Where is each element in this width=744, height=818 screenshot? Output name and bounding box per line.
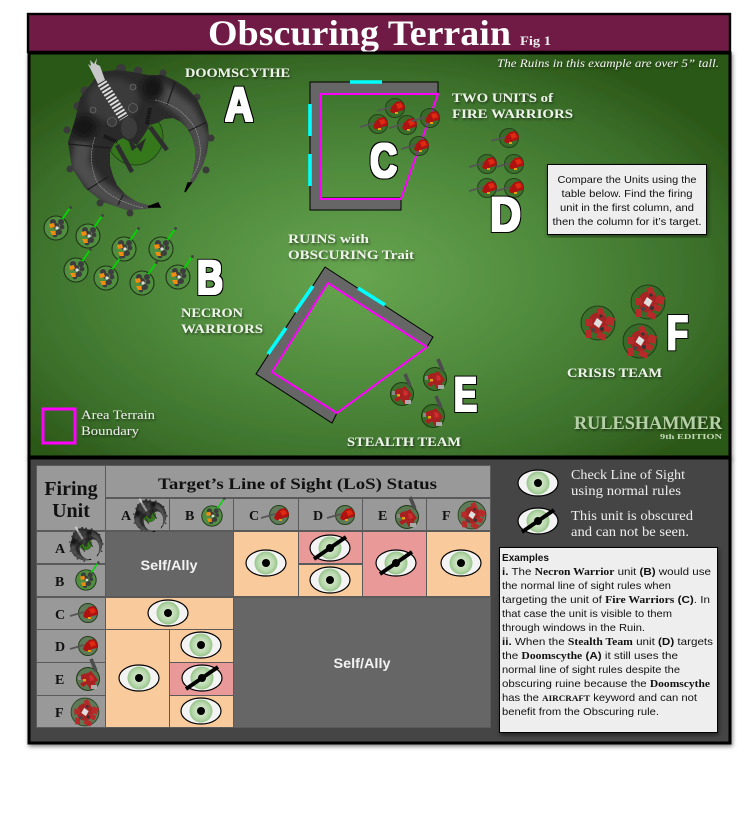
letter E: E	[454, 369, 477, 422]
row F header	[37, 696, 105, 727]
label: two units of Fire Warriors: TWO UNITS of	[452, 90, 554, 105]
row B header: B	[55, 575, 64, 590]
unit A: Doomscythe model	[64, 58, 214, 216]
letter A: A	[225, 79, 253, 132]
cell: F target B visible	[170, 696, 233, 727]
cell: A-B target E obscured	[363, 532, 426, 596]
legend: visible eye: Check Line of Sight	[571, 468, 685, 483]
watermark: Ruleshammer: RULESHAMMER	[574, 413, 722, 434]
examples text box: ii. When the Stealth Team unit (D) targets	[502, 636, 713, 648]
header: firing unit: Unit	[52, 500, 90, 522]
legend: area terrain boundary: Boundary	[81, 423, 140, 438]
instruction callout: table below. Find the firing	[562, 188, 693, 200]
column D header	[299, 499, 362, 530]
cell: A-B target F visible	[427, 532, 490, 596]
header: target status: Target’s Line of Sight (LoS) Status	[158, 476, 437, 493]
examples text box: obscuring ruine because the Doomscythe	[502, 678, 710, 690]
column F header	[427, 499, 490, 530]
instruction callout	[548, 164, 706, 234]
row E header	[37, 659, 105, 695]
examples text box: targeting the unit of Fire Warriors (C). In	[502, 594, 710, 606]
panel: line of sight table section	[29, 458, 730, 743]
unit B: Necron Warriors	[44, 206, 194, 295]
row A header	[37, 526, 105, 563]
title: Obscuring Terrain	[208, 13, 511, 53]
panel: battlefield map	[29, 53, 730, 457]
column D header: D	[313, 509, 323, 524]
row D header: D	[55, 640, 65, 655]
examples text box: the normal line of sight rules when	[502, 580, 671, 592]
examples text box: benefit from the Obscuring rule.	[502, 706, 659, 718]
cell: D-F target A visible	[106, 630, 169, 727]
legend: obscured eye: and can not be seen.	[571, 525, 689, 540]
label: Necron Warriors: NECRON	[181, 305, 244, 320]
header: target status	[106, 466, 490, 497]
examples text box: i. The Necron Warrior unit (B) would use	[502, 566, 711, 578]
cell: self/ally C-F: Self/Ally	[334, 656, 391, 671]
examples text box: through windows in the Ruin.	[502, 622, 645, 634]
letter F: F	[667, 307, 688, 360]
column B header: B	[185, 509, 194, 524]
examples text box: normal line of sight rules despite the	[502, 664, 680, 676]
legend: area terrain boundary	[43, 407, 156, 443]
legend: obscured eye	[518, 508, 693, 540]
column B header	[170, 497, 233, 530]
figure number: Fig 1	[520, 33, 551, 48]
cell: B target D visible	[299, 565, 362, 596]
unit F: Crisis Team	[581, 285, 665, 359]
label: ruins with Obscuring trait: RUINS with	[288, 231, 370, 246]
examples text box: that case the unit is visible to them	[502, 608, 672, 620]
examples text box	[500, 548, 718, 732]
label: ruins with Obscuring trait	[288, 231, 415, 262]
ruin: rotated with area boundary	[256, 267, 433, 423]
row A header: A	[55, 542, 66, 557]
terrain note: The Ruins in this example are over 5” tall.	[497, 56, 719, 70]
cell: self/ally C-F	[234, 598, 490, 727]
column A header: A	[121, 509, 132, 524]
unit E: Stealth Team	[390, 359, 446, 428]
table: firing unit vs target status	[36, 465, 491, 728]
watermark: Ruleshammer: 9th EDITION	[660, 432, 723, 441]
header: firing unit	[37, 466, 105, 530]
column E header	[363, 497, 426, 530]
legend: obscured eye: This unit is obscured	[571, 509, 693, 524]
instruction callout: then the column for it’s target.	[552, 216, 702, 228]
legend: area terrain boundary: Area Terrain	[81, 407, 156, 422]
unit D: Fire Warriors	[469, 128, 524, 198]
row B header	[37, 561, 105, 596]
column A header	[106, 498, 169, 534]
column E header: E	[378, 509, 387, 524]
label: Necron Warriors	[181, 305, 263, 336]
row D header	[37, 630, 105, 662]
label: Crisis Team: CRISIS TEAM	[567, 365, 662, 380]
instruction callout: unit in the first column, and	[560, 202, 694, 214]
label: ruins with Obscuring trait: OBSCURING Trait	[288, 247, 415, 262]
label: Doomscythe: DOOMSCYTHE	[185, 65, 290, 80]
label: two units of Fire Warriors	[452, 90, 573, 121]
row C header: C	[55, 608, 65, 623]
unit C: Fire Warriors	[360, 98, 440, 156]
cell: self/ally A-B	[106, 532, 233, 596]
label: Stealth Team: STEALTH TEAM	[347, 434, 461, 449]
cell: A target D obscured	[299, 532, 362, 563]
legend: visible eye: using normal rules	[571, 484, 681, 499]
legend: visible eye	[518, 468, 685, 499]
title banner	[28, 13, 730, 53]
examples text box: Examples	[502, 552, 549, 564]
examples text box: has the AIRCRAFT keyword and can not	[502, 692, 697, 704]
cell: A-B target C visible	[234, 532, 298, 596]
letter C: C	[370, 135, 397, 188]
letter B: B	[197, 252, 223, 305]
column C header	[234, 499, 298, 530]
column F header: F	[442, 509, 451, 524]
cell: C target A-B visible	[106, 598, 233, 629]
column C header: C	[249, 509, 259, 524]
row C header	[37, 598, 105, 629]
instruction callout: Compare the Units using the	[558, 174, 697, 186]
ruin: upper with area boundary	[310, 82, 438, 210]
cell: self/ally A-B: Self/Ally	[140, 558, 198, 573]
letter D: D	[490, 189, 521, 242]
label: Necron Warriors: WARRIORS	[181, 321, 263, 336]
row F header: F	[55, 706, 64, 721]
label: two units of Fire Warriors: FIRE WARRIORS	[452, 106, 573, 121]
cell: E target B obscured	[170, 663, 233, 695]
examples text box: the Doomscythe (A) it still uses the	[502, 650, 678, 662]
cell: D target B visible	[170, 630, 233, 662]
header: firing unit: Firing	[44, 478, 98, 500]
row E header: E	[55, 673, 64, 688]
